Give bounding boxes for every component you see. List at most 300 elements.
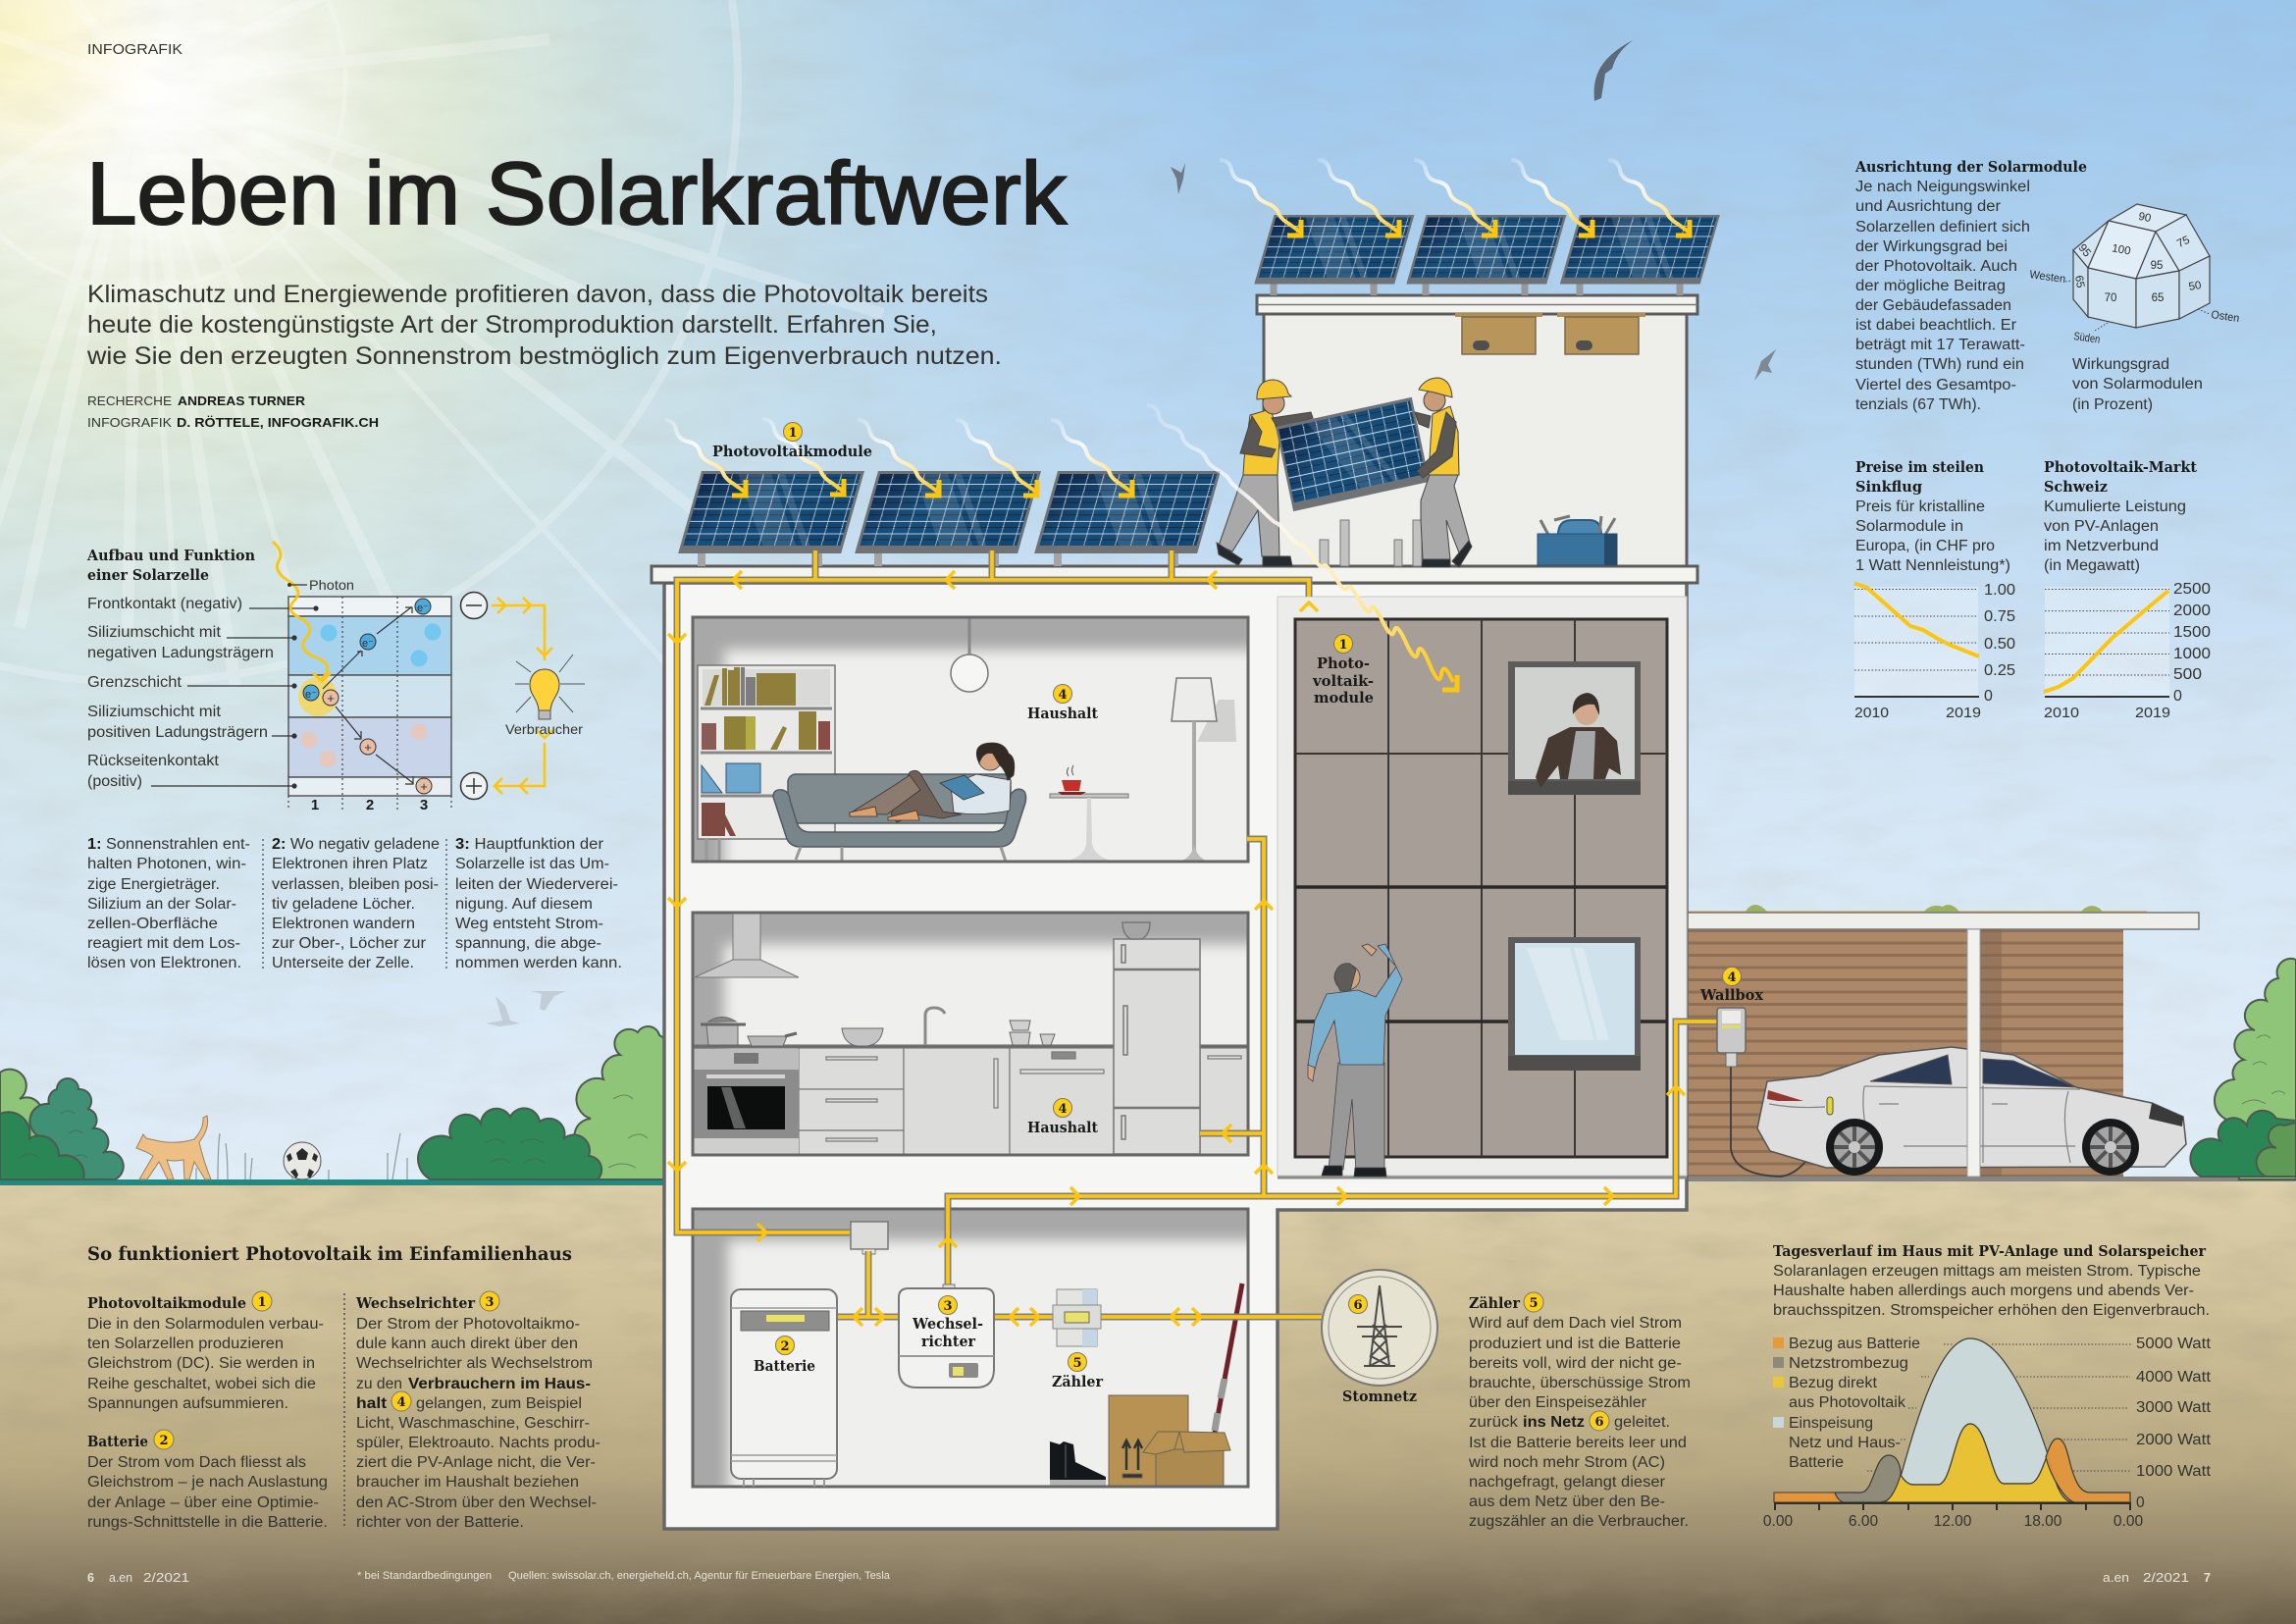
man looking up — [1308, 944, 1402, 1177]
consumer label: Verbraucher — [505, 721, 583, 737]
minus terminal — [461, 593, 487, 618]
description: 1 Watt Nennleistung*) — [1855, 557, 2010, 574]
intro text: Klimaschutz und Energiewende profitieren davon, dass die Photovoltaik bereits — [87, 281, 988, 308]
photon label: Photon — [309, 577, 354, 593]
section: Wechselrichter: Der Strom der Photovoltaikmo- — [356, 1316, 580, 1333]
reading woman — [850, 743, 1015, 822]
column numbers: 2 — [366, 797, 374, 813]
room outlines — [693, 617, 1248, 1487]
sun rays — [0, 0, 883, 687]
explanation 1: halten Photonen, win- — [87, 856, 246, 872]
electric car — [1757, 1047, 2186, 1176]
mounting posts — [1320, 520, 1422, 566]
label: photovoltaic facade: voltaik- — [1312, 673, 1374, 690]
worker right — [1415, 378, 1472, 567]
soccer ball — [284, 1142, 321, 1179]
car tail light — [1767, 1090, 1803, 1101]
facade surround — [1278, 597, 1687, 1176]
x axis labels: 0.00 — [1763, 1513, 1793, 1530]
column dividers — [288, 597, 451, 810]
label: Wechselrichter — [912, 1295, 983, 1350]
car rear window — [1870, 1055, 1952, 1084]
axis labels: 0.50 — [1984, 636, 2015, 653]
footer left: 6 — [87, 1571, 94, 1585]
dome caption — [2072, 356, 2203, 413]
section: Batterie — [87, 1430, 328, 1531]
label: Wechselrichter: 3 — [943, 1299, 953, 1314]
body text: stunden (TWh) rund ein — [1855, 356, 2024, 373]
label: Haushalt living room — [1027, 685, 1098, 722]
axis labels — [2044, 581, 2211, 721]
explanation 1: Silizium an der Solar- — [87, 896, 236, 913]
label: Zaehler — [1052, 1352, 1103, 1390]
electron paths — [323, 607, 413, 784]
car details — [1769, 1085, 2080, 1163]
swallow — [1594, 40, 1633, 101]
plot area — [2045, 587, 2169, 697]
section: Zaehler: Zähler — [1469, 1294, 1521, 1312]
room: living room — [695, 618, 1246, 860]
section: Wechselrichter: richter von der Batterie. — [356, 1514, 524, 1531]
label: Batterie: 2 — [780, 1339, 790, 1354]
intro text: heute die kostengünstigste Art der Stromproduktion darstellt. Erfahren Sie, — [87, 311, 937, 339]
dome values — [2072, 211, 2203, 304]
wallbox — [1717, 1008, 1829, 1177]
explanation 3: nommen werden kann. — [455, 955, 622, 971]
explanation 2: Elektronen wandern — [272, 916, 415, 932]
flow arrows — [668, 571, 1685, 1326]
leader lines — [151, 606, 318, 788]
photon label — [287, 577, 354, 593]
label: Haushalt kitchen — [1027, 1099, 1098, 1136]
label: photovoltaikmodule roof: Photovoltaikmodule — [712, 444, 872, 460]
title: Leben im Solarkraftwerk — [86, 145, 1068, 243]
axis labels: 0.75 — [1984, 608, 2015, 625]
section: Wechselrichter: Wechselrichter — [355, 1294, 476, 1312]
description: Solaranlagen erzeugen mittags am meisten Strom. Typische — [1773, 1263, 2201, 1280]
heading: Photovoltaik-Markt — [2044, 458, 2197, 476]
dome values: 50 — [2188, 280, 2203, 293]
column rule — [343, 1293, 345, 1528]
carport — [1687, 905, 2199, 1177]
optimiser box — [851, 1222, 888, 1254]
workers with panel — [1217, 378, 1472, 567]
cat — [136, 1116, 211, 1179]
base line — [1278, 1176, 1687, 1179]
sun rays upper panels — [1220, 160, 1690, 236]
explanation 2: Unterseite der Zelle. — [272, 955, 414, 971]
body text: ist dabei beachtlich. Er — [1855, 317, 2016, 334]
y axis labels: 1000 Watt — [2136, 1463, 2212, 1480]
label: photovoltaic facade — [1312, 634, 1374, 707]
gridlines — [1867, 1344, 2131, 1471]
grass line — [0, 1177, 2296, 1185]
section: Photovoltaikmodule: Gleichstrom (DC). Sie werden in — [87, 1355, 315, 1372]
pylon icon — [1357, 1285, 1402, 1366]
heading: einer Solarzelle — [87, 566, 209, 584]
orange baseline left — [1774, 1493, 1845, 1502]
section: Zaehler: produziert und ist die Batterie — [1469, 1336, 1681, 1352]
explanation 1: zige Energieträger. — [87, 876, 220, 893]
market line — [2044, 591, 2168, 692]
section: Zaehler: Wird auf dem Dach viel Strom — [1469, 1315, 1682, 1332]
electrons: e⁻ — [362, 638, 374, 650]
label: Wallbox: 4 — [1727, 970, 1737, 985]
heading: Ausrichtung der Solarmodule — [1854, 158, 2087, 176]
body text: der Photovoltaik. Auch — [1855, 258, 2017, 275]
dome values: 65 — [2152, 292, 2164, 304]
plot area — [1854, 587, 1978, 697]
y axis labels: 5000 Watt — [2136, 1336, 2212, 1352]
column numbers: 1 — [311, 797, 319, 813]
x axis labels: 18.00 — [2024, 1513, 2062, 1530]
description: von PV-Anlagen — [2044, 518, 2159, 535]
holes: + — [420, 779, 428, 794]
label: Wechselrichter: richter — [921, 1334, 975, 1350]
body text: und Ausrichtung der — [1855, 198, 2001, 215]
y axis labels — [2136, 1336, 2212, 1511]
explanation 2: Elektronen ihren Platz — [272, 856, 428, 872]
axis labels: 1.00 — [1984, 582, 2015, 599]
heading: Schweiz — [2044, 478, 2108, 496]
inverter — [899, 1284, 994, 1388]
label: Zaehler: Zähler — [1052, 1374, 1103, 1390]
layer labels: Grenzschicht — [87, 674, 183, 691]
worker left — [1217, 380, 1313, 566]
section: Zaehler: über den Einspeisezähler — [1469, 1394, 1646, 1411]
power grid badge circle — [1322, 1270, 1437, 1386]
building shell — [652, 295, 1697, 1529]
description: im Netzverbund — [2044, 538, 2159, 554]
section: Wechselrichter: ziert die PV-Anlage nicht, die Ver- — [356, 1454, 596, 1471]
upper window — [1508, 661, 1641, 795]
section: Batterie: 2 — [159, 1434, 169, 1448]
x axis labels: 12.00 — [1934, 1513, 1972, 1530]
column numbers: 3 — [420, 797, 428, 813]
room: kitchen — [695, 915, 1246, 1154]
panel: solar cell diagram — [86, 542, 622, 971]
side table with cup — [1050, 765, 1128, 862]
heading: Aufbau und Funktion — [86, 547, 255, 564]
oven — [693, 1049, 799, 1155]
section: Wechselrichter: Licht, Waschmaschine, Geschirr- — [356, 1415, 590, 1432]
section: Photovoltaikmodule — [87, 1291, 324, 1412]
rear wheel — [1826, 1119, 1883, 1176]
dome values: 75 — [2175, 235, 2192, 250]
badge: photovoltaikmodule roof: 1 — [788, 426, 798, 441]
grid supply — [1835, 1455, 1901, 1502]
current loop — [492, 598, 552, 794]
fridge — [1114, 922, 1200, 1154]
section: Batterie: Gleichstrom – je nach Auslastung — [87, 1474, 328, 1491]
bird small 2 — [1754, 349, 1776, 381]
legend: Einspeisung — [1789, 1415, 1873, 1432]
holes: + — [364, 740, 372, 755]
car hood and lamp — [2149, 1103, 2183, 1126]
layer labels: Frontkontakt (negativ) — [87, 596, 242, 612]
label: Stromnetz: Stomnetz — [1342, 1388, 1417, 1405]
axis labels: 1000 — [2173, 646, 2211, 662]
heading — [1855, 458, 1984, 496]
photon arrowhead — [313, 673, 331, 681]
label: Haushalt kitchen: Haushalt — [1027, 1120, 1098, 1136]
dome values: 100 — [2111, 242, 2131, 258]
section: Wechselrichter: Wechselrichter als Wechselstrom — [356, 1355, 593, 1372]
explanation 3: Solarzelle ist das Um- — [455, 856, 609, 872]
axis — [1854, 696, 1979, 698]
section: Zaehler: bereits voll, wird der nicht ge- — [1469, 1355, 1682, 1372]
grass tufts — [196, 1133, 407, 1179]
battery use — [2046, 1439, 2130, 1502]
sun rays main panels — [664, 419, 1132, 496]
carried panel — [1276, 397, 1430, 511]
x axis labels: 0.00 — [2113, 1513, 2143, 1530]
axis labels: 500 — [2173, 666, 2202, 683]
section: Photovoltaikmodule: ten Solarzellen produzieren — [87, 1336, 284, 1352]
footer right: 7 — [2204, 1571, 2211, 1585]
panel: market chart — [2044, 458, 2211, 721]
gridlines — [1854, 589, 1978, 670]
section: Zaehler: geleitet. — [1614, 1414, 1670, 1431]
large sun ray onto facade — [1147, 405, 1457, 690]
column numbers — [311, 797, 428, 813]
dome values: 90 — [2137, 211, 2152, 225]
panel: module orientation — [1854, 158, 2240, 413]
panel seams — [1295, 619, 1667, 1157]
sky background — [0, 0, 2296, 1187]
legend — [1773, 1336, 1920, 1471]
section: Zaehler: Ist die Batterie bereits leer und — [1469, 1435, 1687, 1451]
cable casing — [677, 550, 1717, 1317]
charging connector — [1827, 1097, 1833, 1115]
description: brauchsspitzen. Stromspeicher erhöhen den Eigenverbrauch. — [1773, 1302, 2210, 1319]
description: Preis für kristalline — [1855, 498, 1985, 515]
credits: D. RÖTTELE, INFOGRAFIK.CH — [177, 415, 379, 430]
credits — [87, 393, 379, 430]
gridlines — [2045, 589, 2169, 675]
explanation 2: tiv geladene Löcher. — [272, 896, 415, 913]
carport post — [1967, 929, 1980, 1177]
label: Wallbox: Wallbox — [1699, 987, 1763, 1004]
explanation 3: spannung, die abge- — [455, 935, 601, 952]
room: basement — [695, 1211, 1246, 1486]
dome values: 95 — [2076, 242, 2093, 259]
panel: price chart — [1854, 458, 2015, 721]
trees and bushes left — [0, 1070, 124, 1179]
electrons: e⁻ — [417, 602, 429, 614]
heading: So funktioniert Photovoltaik im Einfamilienhaus — [87, 1243, 572, 1265]
feed-in — [1901, 1338, 2048, 1485]
y axis labels: 2000 Watt — [2136, 1432, 2212, 1448]
solar panels upper roof — [1254, 215, 1720, 295]
section: Batterie: Der Strom vom Dach fliesst als — [87, 1454, 306, 1471]
trees and bushes right — [2190, 959, 2296, 1179]
x axis labels: 6.00 — [1849, 1513, 1878, 1530]
axis — [2045, 696, 2169, 698]
section: Zaehler: zurück — [1469, 1414, 1518, 1431]
axis labels: 0.25 — [1984, 662, 2015, 679]
cookware and dishes — [701, 1008, 1055, 1046]
footnote and sources: Quellen: swissolar.ch, energieheld.ch, Agentur für Erneuerbare Energien, Tesla — [508, 1570, 891, 1582]
electrons: e⁻ — [305, 689, 317, 701]
legend: Netz und Haus- — [1789, 1435, 1901, 1451]
section: Wechselrichter: gelangen, zum Beispiel — [416, 1395, 582, 1412]
carport roof — [1687, 913, 2199, 929]
lower window — [1508, 937, 1641, 1071]
axis labels: 1500 — [2173, 624, 2211, 641]
facade — [1295, 619, 1667, 1177]
lower building — [664, 583, 1687, 1529]
layer labels: Siliziumschicht mit — [87, 624, 222, 641]
footnote and sources: * bei Standardbedingungen — [357, 1570, 492, 1582]
compass labels — [2029, 269, 2240, 346]
axis labels: 2010 — [1854, 705, 1889, 721]
section: Photovoltaikmodule: 1 — [257, 1295, 267, 1310]
badge: photovoltaikmodule roof — [783, 422, 803, 442]
axis labels: 2019 — [2135, 705, 2170, 721]
description — [2044, 498, 2186, 574]
credits: INFOGRAFIK — [87, 415, 172, 430]
footer right: a.en — [2103, 1571, 2129, 1585]
footer right: 2/2021 — [2143, 1571, 2189, 1585]
legend: Netzstrombezug — [1789, 1355, 1908, 1372]
bird small 1 — [1171, 163, 1185, 194]
post shadow — [1980, 929, 2002, 1177]
skis — [1215, 1283, 1242, 1433]
floor lamp — [1172, 678, 1236, 862]
section: Zaehler: ins Netz — [1523, 1414, 1585, 1431]
description: Haushalte haben allerdings auch morgens und abends Ver- — [1773, 1283, 2194, 1299]
section: Zaehler: zugszähler an die Verbraucher. — [1469, 1513, 1689, 1530]
ice skates — [1050, 1441, 1106, 1487]
cable yellow — [677, 550, 1717, 1317]
section: Zaehler: 5 — [1529, 1296, 1539, 1311]
cell layers — [288, 597, 451, 796]
dome values: 70 — [2105, 292, 2116, 304]
section: Wechselrichter: den AC-Strom über den Wechsel- — [356, 1494, 597, 1511]
credits: RECHERCHE — [87, 393, 172, 408]
layer labels: positiven Ladungsträgern — [87, 724, 268, 741]
section: Photovoltaikmodule: Spannungen aufsummieren. — [87, 1395, 288, 1412]
body text: der Wirkungsgrad bei — [1855, 238, 2008, 255]
label: Stromnetz: 6 — [1353, 1298, 1363, 1313]
section: Batterie: Batterie — [87, 1433, 148, 1450]
section: Batterie: der Anlage – über eine Optimie- — [87, 1494, 319, 1511]
section: Zaehler: nachgefragt, gelangt dieser — [1469, 1474, 1665, 1491]
panel seams thick — [1295, 887, 1667, 1022]
main roof slab — [652, 566, 1697, 583]
carrier dots — [300, 624, 442, 767]
layer labels: (positiv) — [87, 773, 142, 790]
wooden wall — [1687, 929, 2123, 1177]
cardboard boxes — [1109, 1395, 1230, 1487]
label: photovoltaic facade: Photo- — [1317, 655, 1370, 672]
explanation 2: verlassen, bleiben posi- — [272, 876, 439, 893]
electrons — [303, 599, 431, 701]
compass labels: Süden — [2073, 331, 2101, 346]
x axis — [1774, 1503, 2131, 1510]
green roof — [1687, 905, 2147, 913]
y axis labels: 3000 Watt — [2136, 1399, 2212, 1416]
efficiency dome — [2073, 204, 2210, 328]
bookshelf — [698, 665, 835, 862]
direct PV use — [1882, 1424, 2073, 1502]
section: Zaehler: aus dem Netz über den Be- — [1469, 1493, 1665, 1510]
column rules — [263, 839, 446, 969]
upper roof slab — [1257, 295, 1697, 314]
price line — [1854, 583, 1979, 656]
label: Stromnetz — [1342, 1295, 1417, 1405]
roof panels main — [678, 471, 1221, 566]
heading — [86, 547, 255, 584]
explanation 1: 1: Sonnenstrahlen ent- — [87, 836, 250, 853]
dome caption: (in Prozent) — [2072, 396, 2153, 413]
label: photovoltaic facade: 1 — [1338, 638, 1348, 653]
body text: der mögliche Beitrag — [1855, 278, 2006, 294]
axis labels: 2500 — [2173, 581, 2211, 598]
section: Wechselrichter: Verbrauchern im Haus- — [408, 1376, 591, 1392]
ground soil — [0, 1181, 2296, 1624]
sofa — [773, 774, 1026, 862]
layer labels: negativen Ladungsträgern — [87, 645, 274, 661]
description — [1773, 1263, 2210, 1319]
distant birds — [486, 991, 566, 1026]
section: Wechselrichter: dule kann auch direkt über den — [356, 1336, 578, 1352]
section: Wechselrichter: 4 — [396, 1395, 406, 1410]
explanation 1 — [87, 836, 250, 971]
intro text: wie Sie den erzeugten Sonnenstrom bestmöglich zum Eigenverbrauch nutzen. — [86, 342, 1002, 370]
intro text — [86, 281, 1002, 370]
kicker: INFOGRAFIK — [87, 41, 183, 58]
body text: Je nach Neigungswinkel — [1855, 179, 2030, 195]
upper storey — [1264, 314, 1687, 566]
explanation 1: lösen von Elektronen. — [87, 955, 241, 971]
facade panels — [1295, 619, 1667, 1157]
compass labels: Westen — [2029, 269, 2066, 286]
meter — [1053, 1289, 1101, 1346]
label: Batterie: Batterie — [754, 1358, 815, 1375]
layer labels: Siliziumschicht mit — [87, 704, 222, 720]
y axis labels: 0 — [2136, 1494, 2145, 1511]
label: Haushalt kitchen: 4 — [1058, 1102, 1068, 1117]
x axis labels — [1763, 1513, 2143, 1530]
body text: Viertel des Gesamtpo- — [1855, 377, 2016, 393]
extractor hood — [695, 913, 799, 977]
description: Solarmodule in — [1855, 518, 1963, 535]
section: Wechselrichter: halt — [356, 1395, 387, 1412]
section: Wechselrichter — [355, 1291, 600, 1531]
y axis labels: 4000 Watt — [2136, 1369, 2212, 1386]
credits: ANDREAS TURNER — [178, 393, 306, 408]
layer labels — [87, 596, 274, 790]
photon wave — [273, 542, 328, 679]
description: Kumulierte Leistung — [2044, 498, 2186, 515]
description: Europa, (in CHF pro — [1855, 538, 1995, 554]
body text: tenzials (67 TWh). — [1855, 396, 1981, 413]
battery — [731, 1289, 837, 1487]
axis labels: 0 — [1984, 688, 1993, 705]
label: Batterie — [754, 1336, 815, 1375]
section: Zaehler — [1468, 1292, 1691, 1530]
holes — [323, 690, 432, 794]
axis labels: 2000 — [2173, 602, 2211, 619]
label: Haushalt living room: Haushalt — [1027, 706, 1098, 722]
toolbox — [1538, 516, 1617, 565]
footer right — [2103, 1571, 2211, 1585]
body text: der Gebäudefassaden — [1855, 297, 2011, 314]
label: Zaehler: 5 — [1072, 1356, 1082, 1371]
explanation 2 — [272, 836, 440, 971]
